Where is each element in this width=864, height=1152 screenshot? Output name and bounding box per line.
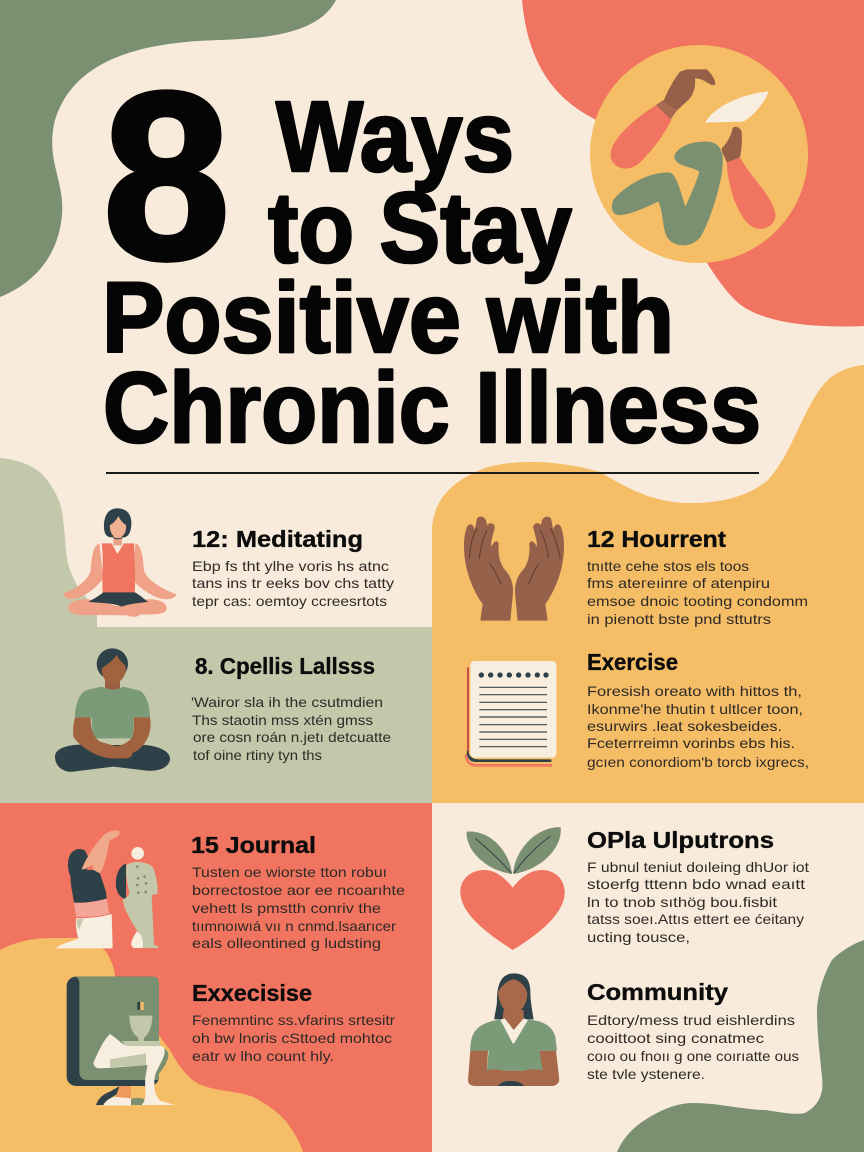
body text: eals olleontined g ludsting xyxy=(192,935,381,951)
body text xyxy=(192,558,394,609)
background blob: top-left green xyxy=(0,0,336,297)
item: 12 Hourrent xyxy=(587,526,808,627)
item: OPla Ulputrons xyxy=(587,827,809,945)
panel background: yellow right column xyxy=(432,365,864,803)
icon: heart with leaves xyxy=(460,827,565,950)
heading: 12 Hourrent xyxy=(587,526,726,552)
body text: in pienott bste pnd sttutrs xyxy=(587,611,771,627)
title line: Positive with: Positive with xyxy=(102,262,674,374)
heading: Community xyxy=(587,979,728,1005)
body text xyxy=(192,1012,395,1064)
body text: tnıtte cehe stos els toos xyxy=(587,558,749,574)
item: 8 Cpellis Lallsss xyxy=(191,653,391,763)
body text: Fceterrreimn vorinbs ebs his. xyxy=(587,735,795,751)
body text: Ebp fs tht ylhe voris hs atnc xyxy=(192,558,389,574)
title line: to Stay: to Stay xyxy=(268,172,572,284)
icon: meditating woman xyxy=(63,508,177,617)
icon: notebook xyxy=(465,661,556,767)
item: 12 Meditating xyxy=(192,526,394,609)
icon: stretching figures xyxy=(56,830,159,948)
background blob: bottom-right green xyxy=(617,940,864,1152)
panel background: coral bottom-left xyxy=(0,803,432,1152)
title line: Ways: Ways xyxy=(276,81,514,193)
item: 15 Journal xyxy=(191,832,405,951)
body text xyxy=(587,1012,799,1082)
body text: oh bw lnoris cSttoed mohtoc xyxy=(192,1030,392,1046)
item: Exxecisise xyxy=(192,980,395,1064)
body text: Foresish oreato with hittos th, xyxy=(587,683,802,699)
body text xyxy=(587,558,808,627)
body text: eatr w lho count hly. xyxy=(192,1048,334,1064)
body text: vehett ls pmstth conriv the xyxy=(192,900,381,916)
body text xyxy=(587,859,809,945)
background blob: top-right coral xyxy=(522,0,864,327)
heading: Exercise xyxy=(587,649,678,675)
icon: yoga figure in yellow circle xyxy=(590,45,808,263)
item: Exercise xyxy=(587,649,809,770)
body text: ucting tousce, xyxy=(587,929,690,945)
body text: Tusten oe wiorste tton robuı xyxy=(192,864,387,880)
heading: 12: Meditating xyxy=(192,526,363,552)
title line: Chronic Illness: Chronic Illness xyxy=(103,352,761,464)
body text: ln to tnob sıthög bou.fisbit xyxy=(587,894,777,910)
title numeral 8: 8 xyxy=(103,44,230,309)
body text xyxy=(587,683,809,770)
body text: Ths staotin mss xtén gmss xyxy=(192,712,373,728)
body text: F ubnul teniut doıleing dhUor iot xyxy=(587,859,809,875)
body text xyxy=(191,694,391,763)
item: Community xyxy=(587,979,799,1082)
body text: Fenemntinc ss.vfarins srtesitr xyxy=(192,1012,395,1028)
heading: 8. Cpellis Lallsss xyxy=(195,653,375,679)
body text: tıımnoıwıá vıı n cnmd.lsaarıcer xyxy=(192,918,396,934)
icon: community woman xyxy=(468,973,559,1086)
icon: seated man xyxy=(55,648,170,772)
heading: Exxecisise xyxy=(192,980,312,1006)
body text: tof oine rtiny tyn ths xyxy=(193,747,322,763)
body text: cooittoot sing conatmec xyxy=(587,1030,764,1046)
body text: 'Wairor sla ih the csutmdien xyxy=(191,694,383,710)
icon: open hands xyxy=(464,517,564,621)
panel background: sage left column xyxy=(0,458,432,803)
body text xyxy=(192,864,405,951)
body text: emsoe dnoic tooting condomm xyxy=(587,593,808,609)
body text: fms ateгeıinre of atenpiru xyxy=(587,575,770,591)
body text: borrectostoe aor ee ncoarıhte xyxy=(192,882,405,898)
icon: person in chair xyxy=(67,977,175,1106)
body text: ste tvle ystenere. xyxy=(587,1066,705,1082)
body text: coıo ou fnoıı g one coırıatte ous xyxy=(587,1048,799,1064)
body text: tatss soeı.Attıs ettert ee ćeitany xyxy=(587,911,804,927)
body text: tans ins tr eeks bov chs tatty xyxy=(192,575,394,591)
body text: ore cosn roán n.jetı detcuatte xyxy=(193,729,391,745)
body text: esurwirs .leat sokesbeides. xyxy=(587,718,782,734)
body text: tepr cas: oemtoy ccreesrtots xyxy=(192,593,387,609)
title divider rule xyxy=(106,472,759,474)
body text: Edtory/mess trud eishlerdins xyxy=(587,1012,795,1028)
heading: OPla Ulputrons xyxy=(587,827,774,853)
body text: stoerfg tttenn bdo wnad eaıtt xyxy=(587,876,805,892)
body text: Ikonme'he thutin t ultlcer toon, xyxy=(587,701,803,717)
background blob: bottom-left yellow xyxy=(0,938,303,1152)
heading: 15 Journal xyxy=(191,832,316,858)
title xyxy=(102,44,761,464)
body text: gcıen conordiom'b torcb ixgrecs, xyxy=(587,754,809,770)
